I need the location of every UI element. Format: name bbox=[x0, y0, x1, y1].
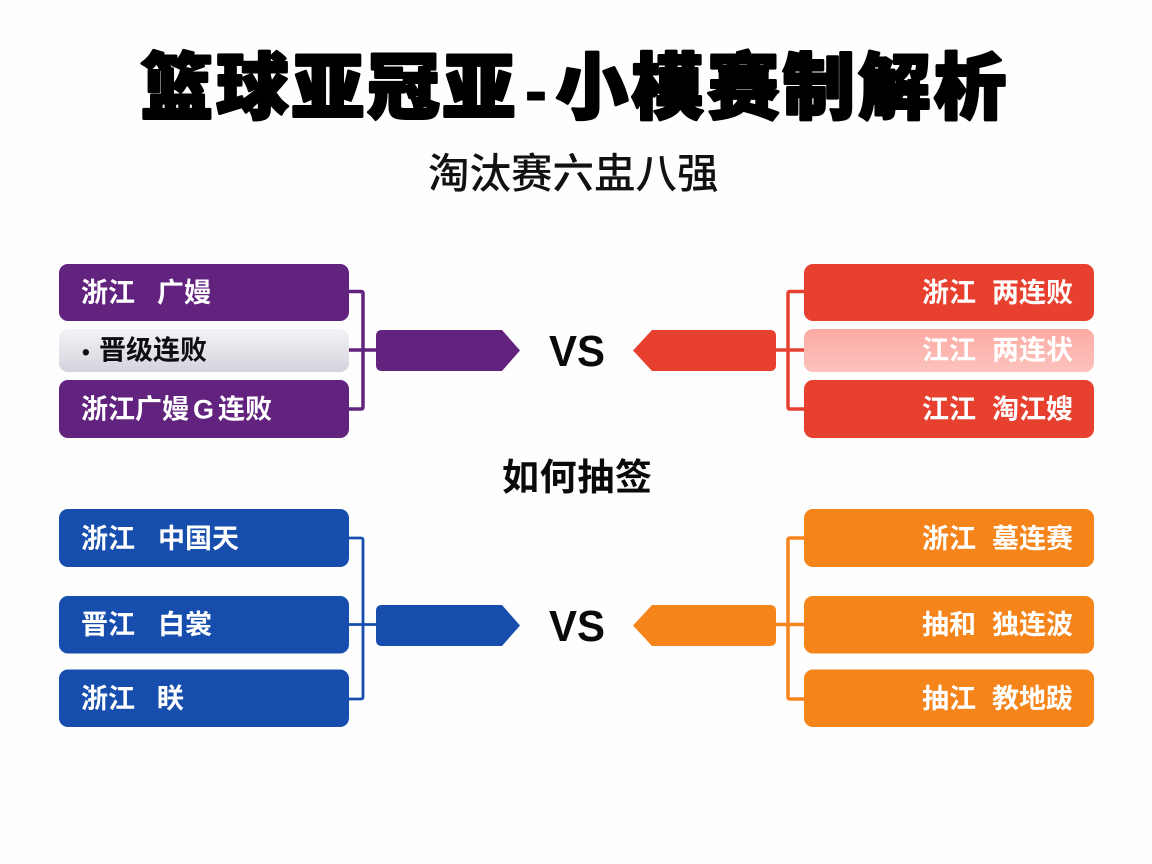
arrow: red bbox=[633, 330, 776, 371]
card: orange bottom: 教地跋 bbox=[992, 684, 1073, 714]
card: orange bottom bbox=[804, 670, 1094, 727]
title: - bbox=[525, 53, 547, 127]
connector: blue bbox=[349, 538, 376, 699]
VS label bottom: VS bbox=[549, 602, 605, 651]
card: blue bottom: 眹 bbox=[157, 684, 184, 714]
card: pink middle: 两连状 bbox=[992, 336, 1073, 366]
card: red bottom bbox=[804, 380, 1094, 438]
card: blue bottom bbox=[59, 670, 349, 727]
panel: blue bracket bbox=[59, 509, 520, 727]
arrow: orange bbox=[633, 605, 776, 646]
card: orange middle: 独连波 bbox=[992, 610, 1073, 640]
connector: red bbox=[776, 292, 804, 409]
card: red bottom: 淘江嫂 bbox=[992, 394, 1073, 424]
arrow: blue bbox=[376, 605, 520, 646]
card: blue top: 浙江 bbox=[81, 524, 135, 554]
connector: purple bbox=[349, 292, 376, 409]
arrow: purple bbox=[376, 330, 520, 371]
card: red top: 浙江 bbox=[922, 278, 976, 308]
card: red bottom: 江江 bbox=[922, 394, 976, 424]
card: orange top bbox=[804, 509, 1094, 567]
card: pink middle: 江江 bbox=[922, 336, 976, 366]
card: blue middle: 白裳 bbox=[158, 610, 212, 640]
card: purple bottom: 连败 bbox=[218, 394, 272, 424]
card: orange bottom: 抽江 bbox=[922, 684, 976, 714]
panel: red bracket bbox=[633, 264, 1094, 438]
card: blue bottom: 浙江 bbox=[81, 684, 135, 714]
card: pink middle bbox=[804, 329, 1094, 372]
card: blue middle bbox=[59, 596, 349, 654]
VS label top: VS bbox=[549, 327, 605, 376]
subtitle: 淘汰赛六盅八强 bbox=[428, 150, 719, 197]
card: grey middle: • bbox=[82, 340, 90, 364]
card: orange top: 浙江 bbox=[922, 524, 976, 554]
card: purple top: 浙江 bbox=[81, 278, 135, 308]
connector: orange bbox=[776, 538, 804, 699]
card: blue middle: 晋江 bbox=[81, 610, 135, 640]
card: purple top: 广嫚 bbox=[157, 278, 211, 308]
card: blue top bbox=[59, 509, 349, 567]
card: purple bottom: G bbox=[193, 394, 214, 424]
card: purple top bbox=[59, 264, 349, 321]
title: 篮球亚冠亚 bbox=[141, 49, 515, 129]
card: orange middle bbox=[804, 596, 1094, 654]
panel: purple bracket bbox=[59, 264, 520, 438]
card: purple bottom bbox=[59, 380, 349, 438]
card: red top: 两连败 bbox=[992, 278, 1073, 308]
card: orange middle: 抽和 bbox=[922, 610, 976, 640]
card: grey middle: 晋级连败 bbox=[99, 336, 207, 366]
card: blue top: 中国天 bbox=[158, 524, 239, 554]
card: grey middle bbox=[59, 329, 349, 372]
title: 小模赛制解析 bbox=[556, 49, 1006, 129]
card: purple bottom: 浙江广嫚 bbox=[81, 394, 189, 424]
section heading: 如何抽签 bbox=[502, 457, 652, 498]
card: orange top: 墓连赛 bbox=[992, 523, 1073, 554]
card: red top bbox=[804, 264, 1094, 321]
panel: orange bracket bbox=[633, 509, 1094, 727]
